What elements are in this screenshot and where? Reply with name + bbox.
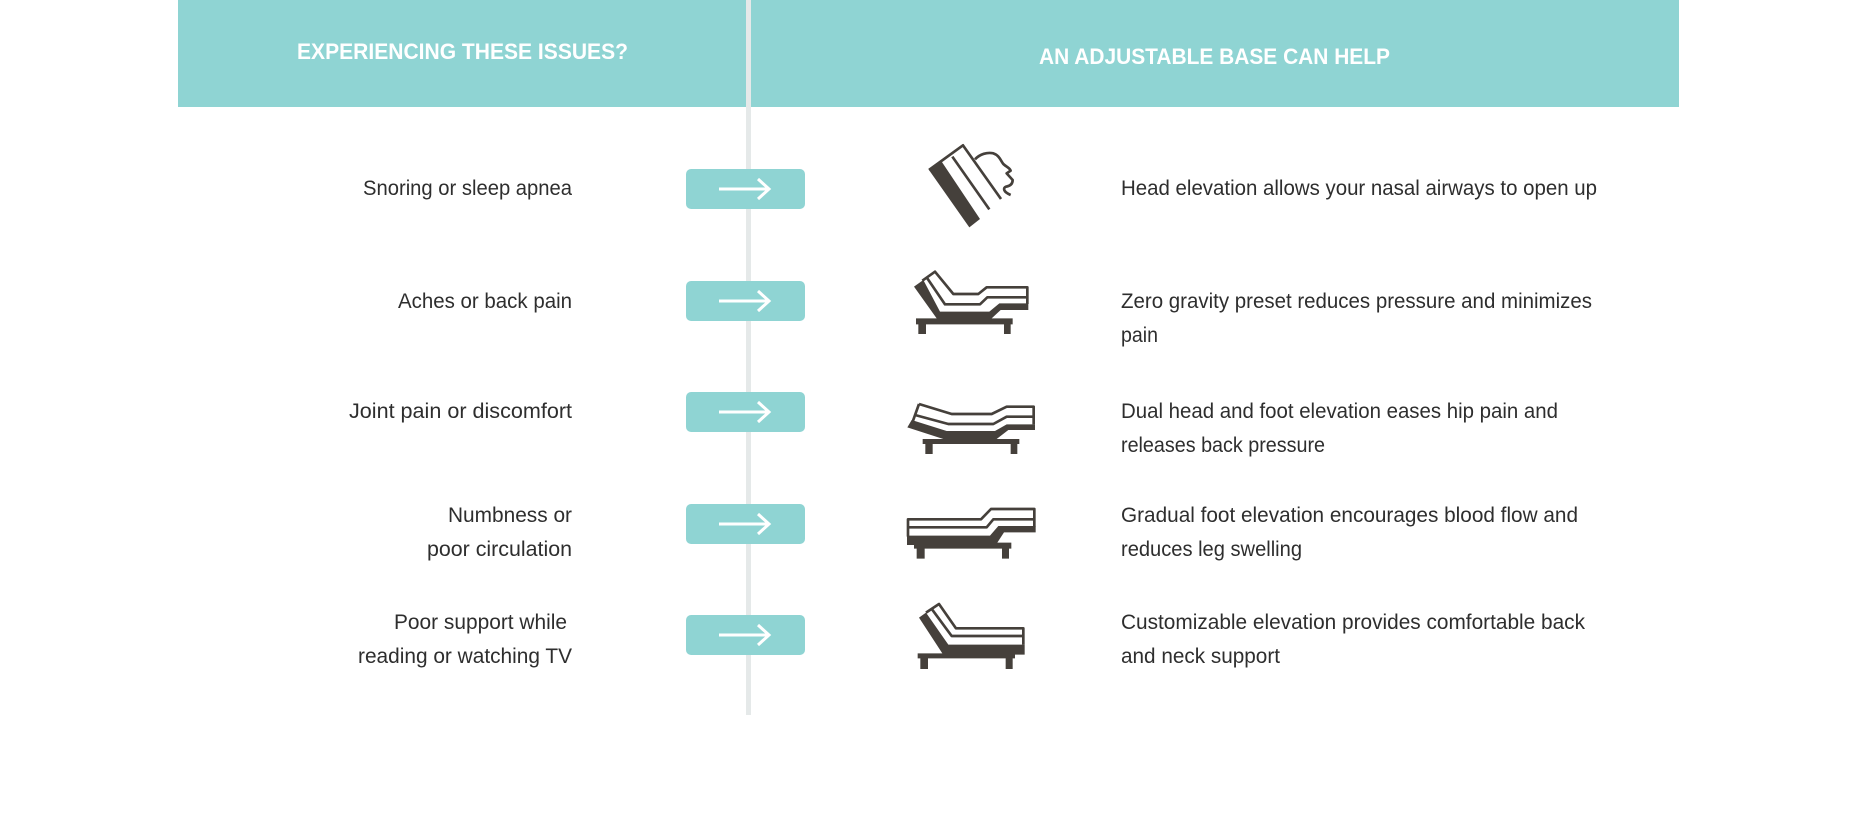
solution text: zero gravity: [1121, 289, 1592, 347]
solution text: dual elevation: Dual head and foot elevation eases hip pain and: [1121, 399, 1558, 423]
row 3: joint pain: [349, 392, 1558, 457]
solution text: foot elevation: [1121, 503, 1578, 561]
solution text: head elevation: Head elevation allows your nasal airways to open up: [1121, 176, 1597, 200]
icon: head elevation bed: [918, 604, 1025, 669]
solution text: foot elevation: Gradual foot elevation encourages blood flow and: [1121, 503, 1578, 527]
center divider line: [746, 0, 751, 715]
solution text: customizable elevation: and neck support: [1121, 644, 1280, 668]
issue text: numbness: poor circulation: [427, 537, 572, 561]
issue text: numbness: [427, 503, 572, 561]
arrow button 5: [686, 615, 805, 655]
issue text: snoring: Snoring or sleep apnea: [363, 176, 572, 200]
row 5: poor support: [358, 604, 1585, 669]
solution text: dual elevation: [1121, 399, 1558, 457]
issue text: poor support: reading or watching TV: [358, 644, 573, 668]
issue text: joint pain: Joint pain or discomfort: [349, 399, 572, 423]
row 4: numbness: [427, 503, 1578, 561]
solution text: dual elevation: releases back pressure: [1121, 433, 1325, 457]
icon: head on tilted mattress: [929, 145, 1013, 227]
row 1: snoring: [363, 145, 1597, 227]
issue text: numbness: Numbness or: [448, 503, 572, 527]
heading: an adjustable base can help: AN ADJUSTABLE BASE CAN HELP: [1039, 44, 1390, 69]
icon: foot elevation bed: [907, 509, 1036, 559]
solution text: zero gravity: Zero gravity preset reduces pressure and minimizes: [1121, 289, 1592, 313]
icon: dual elevation bed: [907, 404, 1035, 454]
arrow button 1: [686, 169, 805, 209]
arrow button 2: [686, 281, 805, 321]
arrow button 3: [686, 392, 805, 432]
solution text: zero gravity: pain: [1121, 323, 1158, 347]
solution text: foot elevation: reduces leg swelling: [1121, 537, 1302, 561]
issue text: aches: Aches or back pain: [398, 289, 572, 313]
solution text: customizable elevation: Customizable elevation provides comfortable back: [1121, 610, 1585, 634]
header band: [178, 0, 1679, 107]
icon: zero gravity bed: [914, 272, 1028, 334]
row 2: aches: [398, 272, 1592, 347]
solution text: customizable elevation: [1121, 610, 1585, 668]
heading: experiencing these issues: EXPERIENCING THESE ISSUES?: [297, 39, 628, 64]
arrow button 4: [686, 504, 805, 544]
issue text: poor support: [358, 610, 573, 668]
issue text: poor support: Poor support while: [394, 610, 567, 634]
